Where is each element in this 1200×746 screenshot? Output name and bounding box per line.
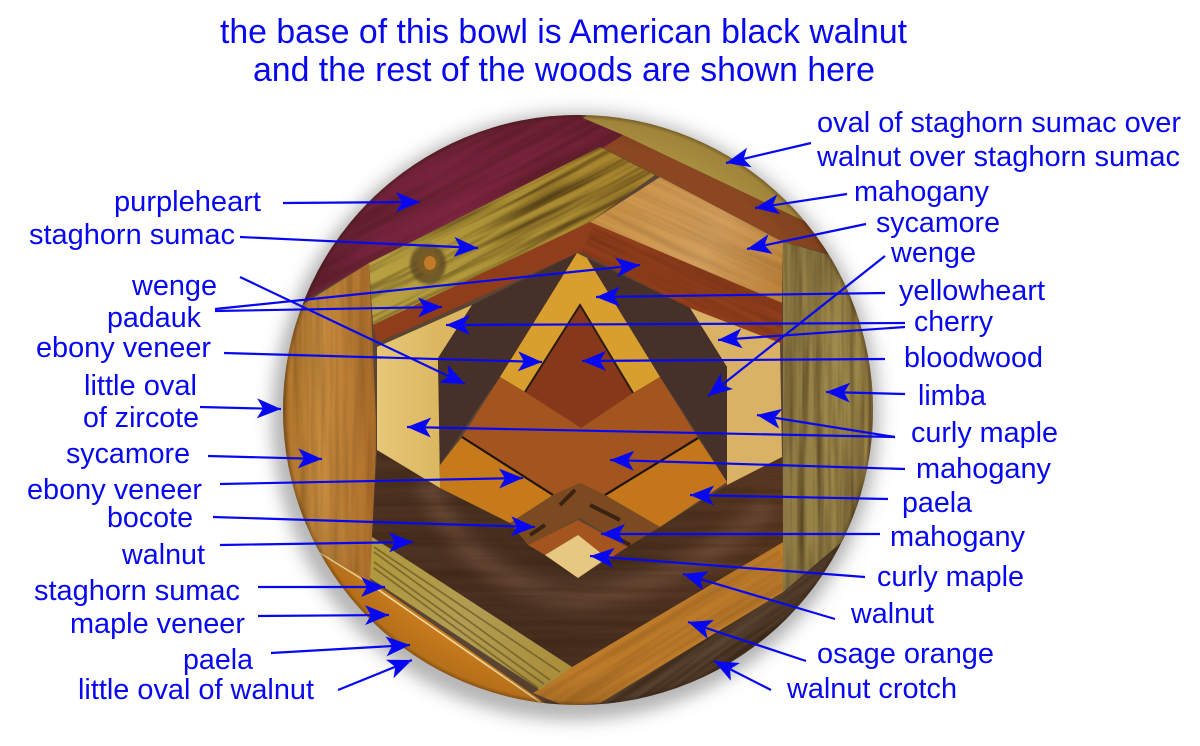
paela right	[605, 438, 727, 527]
label: little oval of zircote: of zircote	[83, 402, 199, 434]
bocote streaks	[530, 490, 630, 545]
label: walnut left	[121, 539, 413, 571]
label: wenge: wenge	[131, 270, 217, 302]
label: wenge	[131, 270, 465, 384]
mahogany lower chevron	[528, 520, 627, 562]
title: the base of this bowl is American black walnut	[220, 13, 908, 51]
staghorn oval top right	[583, 115, 805, 222]
label: ebony veneer	[36, 332, 542, 364]
sycamore left	[283, 263, 376, 580]
label: bocote: bocote	[107, 502, 193, 534]
staghorn bottom grain	[374, 547, 560, 688]
paela left	[440, 437, 553, 523]
label: curly maple lower	[590, 556, 1024, 593]
bowl drop shadow	[276, 115, 877, 716]
label: osage orange: osage orange	[817, 638, 994, 670]
label: yellowheart: yellowheart	[899, 275, 1045, 307]
label: staghorn sumac: staghorn sumac	[29, 219, 235, 251]
sycamore top right	[590, 177, 783, 303]
rim shading	[283, 115, 873, 705]
bloodwood kite	[525, 305, 633, 428]
walnut grain	[372, 456, 783, 644]
sycamore left grain	[283, 264, 376, 578]
label: paela right	[690, 487, 972, 519]
cherry left	[377, 305, 472, 488]
purpleheart grain	[309, 118, 622, 290]
sycamore right grain	[592, 177, 782, 286]
label: padauk	[107, 265, 640, 334]
walnut lower	[372, 450, 783, 667]
label: little oval of walnut	[78, 660, 412, 706]
label: curly maple	[407, 415, 1058, 449]
label: yellowheart	[596, 275, 1045, 307]
label: ebony veneer lower	[27, 474, 523, 506]
curly maple diamond	[545, 535, 607, 578]
osage orange	[533, 542, 783, 706]
mahogany centre	[462, 377, 698, 495]
paela rim	[320, 553, 546, 704]
bowl with wood segments	[283, 115, 873, 705]
limba	[783, 242, 873, 592]
label: wenge right: wenge	[890, 237, 976, 269]
wenge left	[438, 253, 577, 465]
label: cherry	[446, 306, 994, 340]
label: bloodwood: bloodwood	[904, 342, 1043, 374]
cherry right	[690, 308, 782, 485]
padauk grain	[582, 228, 782, 340]
limba grain	[783, 242, 872, 590]
label: padauk: padauk	[107, 302, 202, 334]
ebony line on chevron	[525, 305, 633, 393]
label: bocote	[107, 502, 535, 534]
label: oval of staghorn sumac over walnut over staghorn sumac: walnut over staghorn sumac	[816, 141, 1180, 173]
label: ebony veneer: ebony veneer	[36, 332, 211, 364]
mahogany strip top right	[603, 135, 850, 253]
label: staghorn sumac lower: staghorn sumac	[34, 575, 240, 607]
label: staghorn sumac	[29, 219, 478, 251]
label: walnut right: walnut	[850, 598, 934, 630]
label: paela right: paela	[902, 487, 972, 519]
walnut swirl	[425, 480, 770, 598]
ebony veneer lines	[462, 437, 698, 495]
maple veneer line	[320, 553, 540, 702]
label: mahogany lower: mahogany	[890, 521, 1026, 553]
purpleheart	[304, 115, 622, 299]
label: cherry: cherry	[914, 306, 994, 338]
title: and the rest of the woods are shown here	[253, 51, 875, 89]
label: little oval of zircote	[83, 370, 281, 434]
walnut crotch grain	[608, 546, 840, 704]
label: curly maple lower: curly maple	[877, 561, 1024, 593]
label: paela left: paela	[183, 644, 253, 676]
label: walnut right	[683, 574, 934, 630]
label: walnut crotch: walnut crotch	[786, 673, 957, 705]
label: osage orange	[688, 622, 994, 670]
staghorn sumac top	[369, 147, 655, 325]
wenge right	[587, 258, 727, 482]
label: mahogany centre: mahogany	[916, 453, 1052, 485]
label: sycamore left: sycamore	[66, 438, 190, 470]
staghorn sumac bottom	[370, 537, 572, 690]
yellowheart chevron	[500, 253, 660, 393]
label: oval of staghorn sumac over walnut over staghorn sumac: oval of staghorn sumac over	[817, 107, 1181, 139]
bocote	[510, 483, 660, 547]
label: little oval of walnut: little oval of walnut	[78, 674, 314, 706]
label: walnut crotch	[714, 661, 957, 705]
walnut crotch base rim	[270, 110, 890, 710]
osage grain	[540, 546, 783, 704]
label: sycamore right: sycamore	[876, 207, 1000, 239]
label: paela left	[183, 644, 410, 676]
label: mahogany top: mahogany	[854, 176, 990, 208]
label: walnut left: walnut	[121, 539, 205, 571]
label: sycamore left	[66, 438, 322, 470]
label: maple veneer: maple veneer	[70, 608, 245, 640]
label: oval of staghorn sumac over walnut over staghorn sumac	[726, 107, 1181, 173]
label: wenge right	[708, 237, 976, 396]
staghorn grain	[369, 147, 652, 325]
label: ebony veneer lower: ebony veneer	[27, 474, 202, 506]
label: little oval of zircote: little oval	[84, 370, 197, 402]
label: curly maple: curly maple	[911, 417, 1058, 449]
title	[220, 13, 908, 89]
padauk	[373, 222, 782, 345]
label: sycamore right	[747, 207, 1000, 249]
staghorn knot	[410, 244, 446, 284]
label: limba: limba	[918, 380, 986, 412]
label: mahogany centre	[610, 453, 1052, 485]
label: purpleheart: purpleheart	[114, 186, 261, 218]
label: mahogany top	[755, 176, 990, 208]
